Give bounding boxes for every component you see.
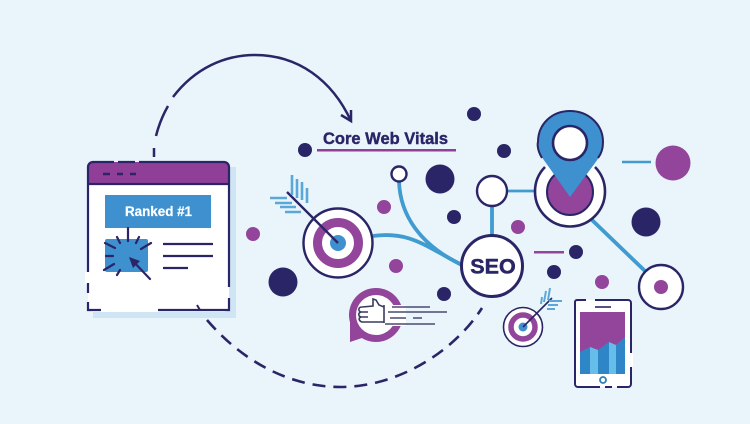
icon: thumbs up speech bubble	[349, 288, 447, 342]
icon: SEO badge: SEO	[470, 254, 516, 278]
label: Ranked #1: Ranked #1	[125, 204, 193, 219]
connector lines	[373, 162, 651, 271]
arrow: dashed arc from browser to Core Web Vitals	[154, 55, 351, 157]
icon: location pin with target	[535, 111, 605, 227]
decorative dots	[246, 107, 690, 301]
icon: right node	[639, 265, 683, 309]
icon: small open node	[392, 166, 406, 182]
heading: Core Web Vitals: Core Web Vitals	[323, 130, 448, 148]
text lines	[163, 244, 213, 268]
icon: phone with chart	[575, 300, 633, 387]
panel: browser window	[85, 162, 236, 318]
icon: target with arrow	[270, 175, 372, 278]
icon: clicked button with cursor	[104, 228, 151, 279]
icon: small target with arrow	[504, 288, 562, 346]
arrow: dashed arc from browser to SEO	[207, 308, 482, 387]
icon: SEO badge	[462, 236, 522, 296]
label: Ranked #1	[105, 195, 211, 228]
icon: white node	[477, 176, 507, 206]
